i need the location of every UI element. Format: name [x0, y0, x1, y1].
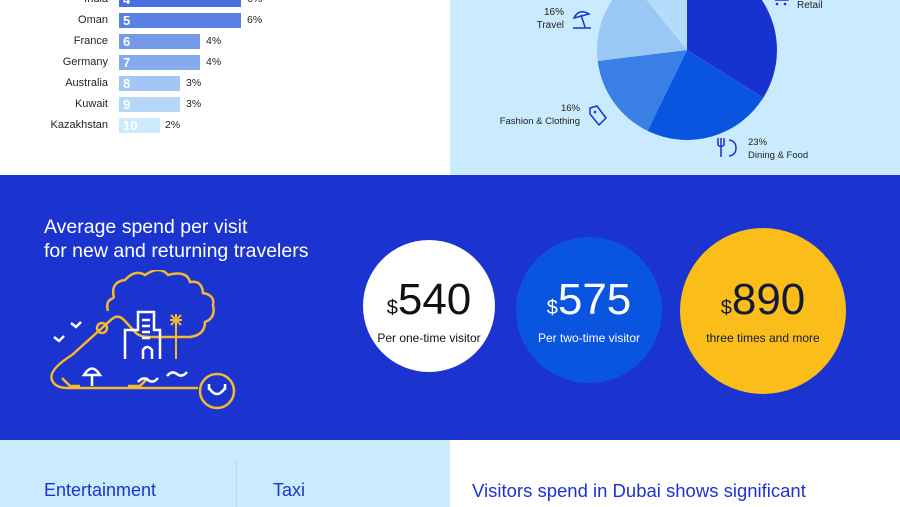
- label: Travel: 16%: [544, 7, 564, 18]
- bar row: Kazakhstan: 2%: [165, 119, 180, 131]
- bar row: Australia: 3%: [186, 77, 201, 89]
- heading: Taxi: Taxi: [273, 480, 305, 500]
- bar row: Australia: 8: [123, 76, 130, 91]
- panel: entertainment and taxi: [0, 440, 450, 507]
- bar row: France: France: [74, 35, 108, 47]
- bar row: Australia: [65, 76, 201, 91]
- bar row: Kazakhstan: Kazakhstan: [51, 119, 108, 131]
- bar row: India: [84, 0, 262, 7]
- bar row: Germany: 4%: [206, 56, 221, 68]
- bar row: Oman: 5: [123, 13, 130, 28]
- heading: for new and returning travelers: [44, 240, 308, 262]
- stat circle: three times and more: three times and more: [706, 331, 820, 345]
- bar row: Oman: Oman: [78, 14, 108, 26]
- heading: Entertainment: Entertainment: [44, 480, 156, 500]
- bar row: France: [74, 34, 221, 49]
- label: Fashion & Clothing: [500, 103, 580, 127]
- label: Retail: Retail: [797, 0, 823, 11]
- bar row: Germany: Germany: [63, 56, 108, 68]
- label: Travel: [536, 7, 564, 31]
- heading: [44, 216, 308, 262]
- stat circle: two-time visitor: [516, 237, 662, 383]
- bar row: France: 4%: [206, 35, 221, 47]
- panel: spending categories pie: [450, 0, 900, 175]
- stat circle: three times and more: [680, 228, 846, 394]
- bar row: Kazakhstan: 10: [123, 118, 137, 133]
- stat circle: one-time visitor: [363, 240, 495, 372]
- icon: beach umbrella: [572, 11, 591, 29]
- label: Dining & Food: 23%: [748, 137, 767, 148]
- stat circle: two-time visitor: $575: [547, 275, 631, 324]
- stat circle: one-time visitor: $540: [387, 275, 471, 324]
- stat circle: two-time visitor: Per two-time visitor: [538, 331, 640, 345]
- bar row: Kuwait: 9: [123, 97, 130, 112]
- label: Dining & Food: Dining & Food: [748, 150, 808, 161]
- icon: cart: [775, 0, 789, 6]
- pie chart: [597, 0, 777, 140]
- bar row: Germany: 7: [123, 55, 130, 70]
- label: Travel: Travel: [537, 20, 564, 31]
- bar row: France: 6: [123, 34, 130, 49]
- label: Fashion & Clothing: Fashion & Clothing: [500, 116, 580, 127]
- bar row: Germany: [63, 55, 221, 70]
- text block: visitors spend: Visitors spend in Dubai shows significant: [472, 480, 806, 501]
- bar row: Kuwait: [75, 97, 201, 112]
- panel: top countries bar chart: [0, 0, 450, 175]
- stat circle: three times and more: $890: [721, 275, 805, 324]
- bar row: Oman: [78, 13, 262, 28]
- bar row: Australia: Australia: [65, 77, 108, 89]
- label: Fashion & Clothing: 16%: [561, 103, 580, 114]
- bar row: Kuwait: Kuwait: [75, 98, 108, 110]
- heading: Average spend per visit: [44, 216, 247, 238]
- stat circle: one-time visitor: Per one-time visitor: [377, 331, 481, 345]
- icon: tag: [589, 105, 607, 126]
- panel: average spend per visit: [0, 175, 900, 440]
- illustration: city and beach: [50, 270, 236, 410]
- label: Dining & Food: [748, 137, 808, 161]
- icon: fork and knife: [717, 138, 737, 157]
- bar row: Kazakhstan: [51, 118, 180, 133]
- bar row: Kuwait: 3%: [186, 98, 201, 110]
- bar row: Oman: 6%: [247, 14, 262, 26]
